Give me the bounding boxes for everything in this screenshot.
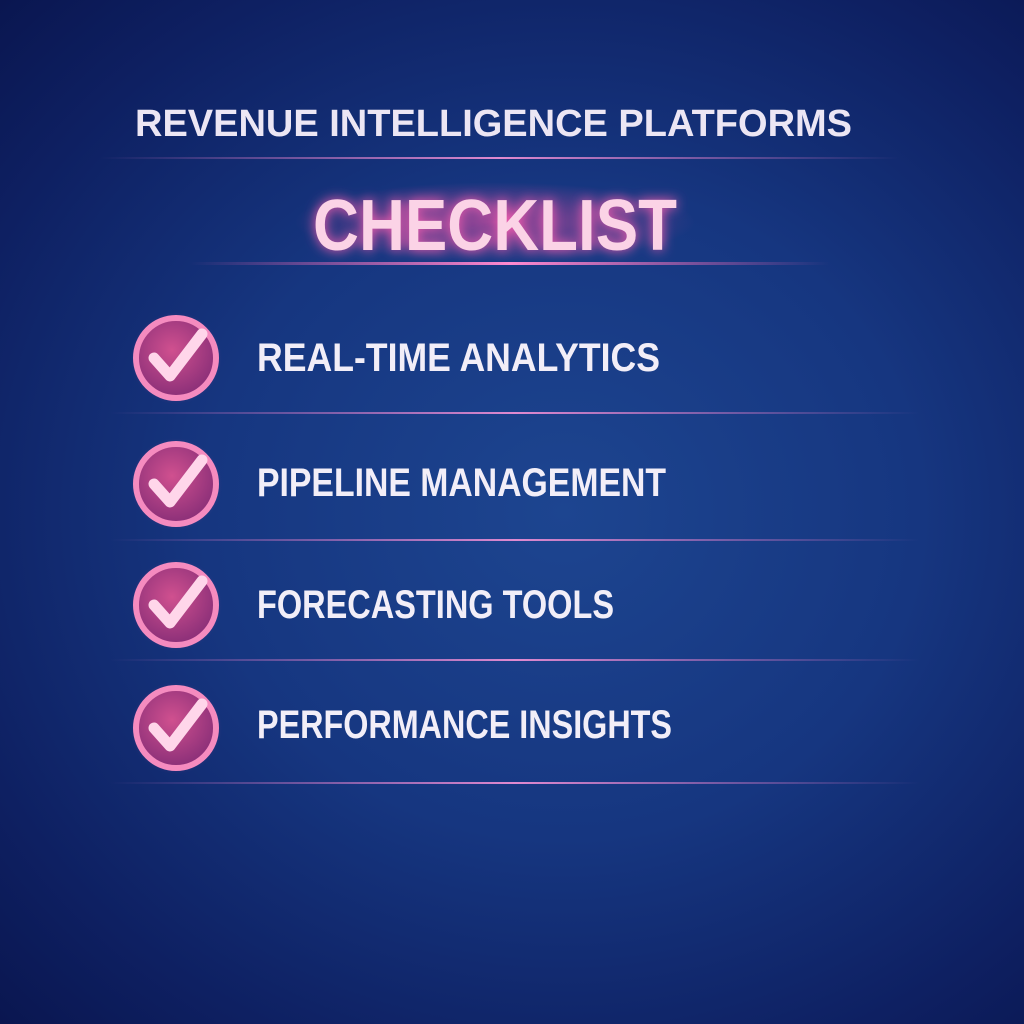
item 1 (130, 312, 660, 404)
icon: check 3 (130, 559, 222, 651)
icon: check 4 (130, 682, 222, 774)
icon: check 1 (130, 312, 222, 404)
title: REVENUE INTELLIGENCE PLATFORMS (135, 103, 852, 145)
item 3 (130, 559, 614, 651)
heading: checklist: CHECKLIST (313, 186, 677, 266)
icon: check 2 (130, 438, 222, 530)
item 2: PIPELINE MANAGEMENT (257, 461, 666, 505)
item 3: FORECASTING TOOLS (257, 583, 614, 627)
item 4: PERFORMANCE INSIGHTS (257, 703, 672, 747)
item 4 (130, 682, 672, 774)
item 2 (130, 438, 666, 530)
heading: checklist: CHECKLIST (313, 186, 677, 266)
item 1: REAL-TIME ANALYTICS (257, 336, 660, 380)
